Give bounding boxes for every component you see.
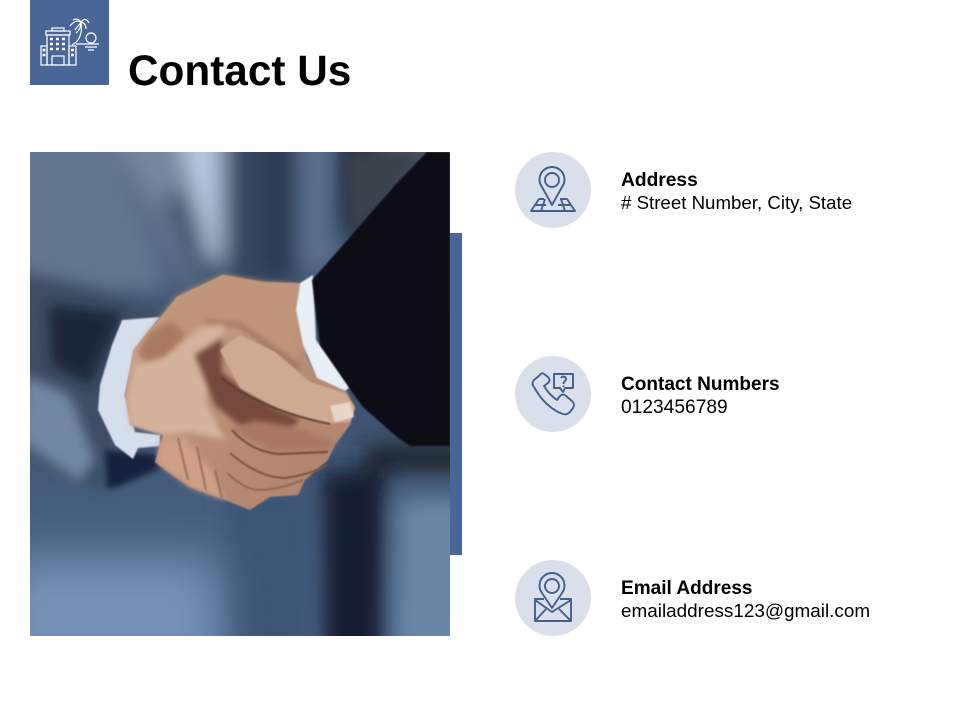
black sleeve and cuff	[296, 152, 450, 446]
right hand fingers below	[157, 437, 225, 500]
accent bar	[449, 233, 462, 555]
left hand back	[127, 325, 225, 440]
jacket sleeve	[30, 274, 162, 492]
icon: hotel and palm tree badge	[30, 0, 109, 85]
photo: business handshake	[30, 152, 450, 636]
text: contact numbers	[621, 374, 780, 418]
text: address: # Street Number, City, State	[621, 192, 852, 213]
contact item: email	[515, 560, 870, 636]
lower fingers	[232, 420, 335, 450]
title: Contact Us	[128, 47, 351, 94]
hands	[125, 275, 355, 510]
icon: phone with question bubble	[515, 356, 591, 432]
text: address	[621, 170, 852, 213]
icon: map pin on map	[515, 152, 591, 228]
contact item: address	[515, 152, 852, 228]
text: email address: emailaddress123@gmail.com	[621, 601, 870, 622]
contact item: phone	[515, 356, 780, 432]
text: email address: Email Address	[621, 578, 753, 599]
text: contact numbers: 0123456789	[621, 397, 728, 418]
dark knuckle shadow	[195, 338, 300, 434]
text: email address	[621, 578, 870, 622]
text: contact numbers: Contact Numbers	[621, 374, 780, 395]
shirt cuff left	[98, 317, 160, 459]
right hand back and thumb	[139, 272, 298, 342]
index finger	[220, 335, 355, 424]
text: address: Address	[621, 170, 698, 191]
icon: map pin on envelope	[515, 560, 591, 636]
